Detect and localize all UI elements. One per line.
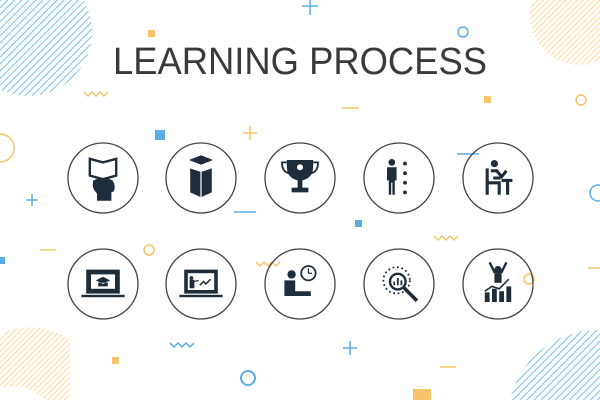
icon circle: laptop presentation — [166, 249, 236, 319]
icon circle: person sitting at desk — [463, 143, 533, 213]
icon circle: book with graduation cap — [166, 143, 236, 213]
icon circle: person with clock — [265, 249, 335, 319]
icon circle: magnifier with chart — [364, 249, 434, 319]
icon circle: trophy — [265, 143, 335, 213]
decoration: bottom-left hatched ring — [0, 327, 70, 400]
icon circle: person celebrating growth chart — [463, 249, 533, 319]
decoration: top-left hatched circle — [0, 0, 92, 96]
decoration: top-right hatched circle — [530, 0, 600, 65]
icon circle: person with rating stars — [364, 143, 434, 213]
icon circle: head with book — [68, 143, 138, 213]
decoration: bottom-right hatched shape — [510, 330, 600, 400]
icon grid — [68, 143, 533, 319]
title: LEARNING PROCESS — [113, 41, 487, 83]
icon circle: laptop with cap — [68, 249, 138, 319]
